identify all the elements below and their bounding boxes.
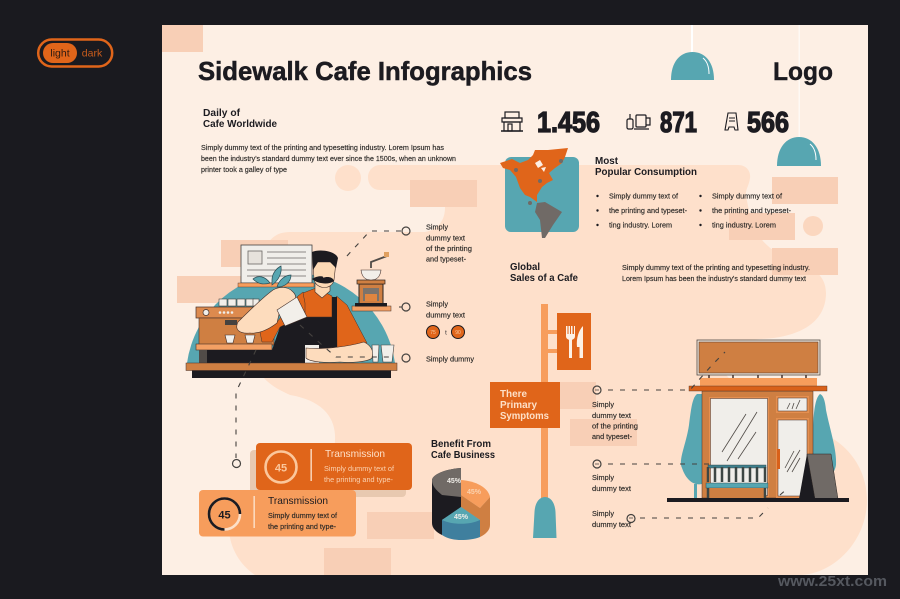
callout text: upper: Simply: [426, 222, 448, 232]
callout text: store lower: Simply: [592, 509, 614, 518]
store sign board: [697, 340, 820, 378]
text block: global sales of a cafe: Lorem Ipsum has been the industry's standard dummy text: [622, 274, 807, 283]
barista shirt left: [260, 292, 308, 342]
cup in hand: [305, 345, 319, 363]
text block: most popular consumption: [595, 155, 791, 230]
top small window: [776, 396, 809, 413]
barista lower arm: [306, 342, 373, 362]
counter: [186, 363, 397, 370]
watermark: www.25xt.com: [777, 574, 887, 590]
transmission card dark: Simply dummy text of: [324, 464, 395, 473]
glasses on counter: [372, 345, 394, 362]
transmission card shadow: [250, 450, 406, 497]
store body: [702, 391, 813, 498]
callout text and badges: middle: Simply: [426, 300, 448, 308]
map of the americas: [500, 148, 579, 238]
there primary symptoms box: [490, 382, 560, 428]
callout text and badges: middle: [426, 300, 466, 338]
trees: [681, 394, 836, 499]
icon: a-frame board: [725, 113, 738, 130]
transmission card light: [199, 490, 356, 536]
light and dark toggle: light: [50, 48, 70, 60]
barista apron body: [207, 300, 337, 363]
hanging lamp left: [671, 25, 714, 80]
coffee grinder: [352, 252, 391, 311]
callout text and badges: middle: 75: [430, 330, 436, 336]
callout text: store upper: [592, 400, 638, 441]
espresso machine: [196, 299, 276, 363]
stat: 871: 871: [660, 107, 697, 139]
light and dark toggle: dark: [82, 48, 103, 60]
text block: most popular consumption: the printing and typeset-: [609, 206, 687, 215]
callout text: upper: and typeset-: [426, 254, 466, 264]
text block: global sales of a cafe: [510, 261, 810, 284]
plant: [253, 266, 291, 287]
apron right strap: [332, 297, 337, 348]
barista illustration: [186, 245, 397, 378]
text block: most popular consumption: ting industry. Lorem: [712, 220, 776, 230]
milk pitcher: [277, 297, 307, 326]
transmission card light: Transmission: [268, 495, 328, 507]
a-frame sign: [799, 454, 838, 499]
transmission card light: the printing and type-: [268, 522, 336, 531]
callout text: store lower: [592, 509, 632, 529]
hanging lamp right: [777, 25, 821, 166]
heading: benefit from cafe business: Benefit From: [431, 438, 491, 450]
text block: most popular consumption: Popular Consumption: [595, 166, 697, 178]
callout text: store upper: and typeset-: [592, 432, 632, 441]
heading: benefit from cafe business: Cafe Business: [431, 449, 495, 461]
callout text: upper: dummy text: [426, 234, 466, 242]
stat: 566: 566: [747, 107, 789, 139]
callout text: store upper: dummy text: [592, 411, 632, 420]
there primary symptoms box: There: [500, 388, 527, 400]
callout lines for barista: [232, 227, 410, 468]
callout text: upper: of the printing: [426, 244, 472, 253]
callout text: lower: Simply dummy: [426, 354, 474, 364]
ground line: [667, 498, 849, 502]
text block: daily of cafe worldwide: Daily of: [203, 107, 240, 119]
logo: Logo: [773, 58, 833, 86]
bench: [706, 465, 768, 498]
text block: global sales of a cafe: Sales of a Cafe: [510, 272, 578, 284]
store illustration: [667, 340, 849, 502]
statistics row: [501, 107, 789, 139]
callout text and badges: middle: dummy text: [426, 310, 466, 320]
transmission card light: 45: [218, 510, 231, 522]
transmission card dark: the printing and type-: [324, 475, 393, 484]
pie chart: 45%: [447, 478, 462, 485]
light and dark toggle: [38, 40, 112, 66]
signpost: [490, 304, 591, 538]
text block: most popular consumption: Simply dummy text of: [712, 192, 783, 200]
text block: daily of cafe worldwide: [201, 107, 456, 174]
text block: most popular consumption: Simply dummy text of: [609, 192, 679, 200]
callout text: store middle: dummy text: [592, 484, 632, 493]
door: [776, 418, 809, 498]
callout text: store middle: [592, 473, 632, 493]
pie chart: [432, 468, 490, 540]
text block: global sales of a cafe: Simply dummy text of the printing and typesetting industry.: [622, 263, 810, 272]
barista shirt right: [336, 296, 367, 348]
barista head: [312, 250, 338, 298]
icon: cafe building: [501, 112, 523, 131]
text block: daily of cafe worldwide: been the industry's standard dummy text ever since the 1500s, when an unknown: [201, 154, 456, 163]
callout lines for store: [593, 352, 788, 522]
callout text: store upper: of the printing: [592, 422, 638, 430]
text block: global sales of a cafe: Global: [510, 261, 540, 273]
transmission card dark: Transmission: [325, 448, 385, 460]
callout text and badges: middle: t: [445, 330, 447, 336]
title: Sidewalk Cafe Infographics: [198, 56, 532, 86]
callout text: store middle: Simply: [592, 473, 614, 482]
text block: most popular consumption: ting industry. Lorem: [609, 220, 672, 230]
text block: most popular consumption: the printing and typeset-: [712, 206, 791, 215]
text block: daily of cafe worldwide: Cafe Worldwide: [203, 118, 277, 130]
transmission card dark: [256, 443, 412, 490]
callout text and badges: middle: 90: [455, 330, 461, 336]
poster and shelf: [238, 245, 314, 287]
transmission card light: Simply dummy text of: [268, 511, 338, 520]
icon: coffee cup: [627, 114, 650, 129]
text block: daily of cafe worldwide: Simply dummy text of the printing and typesetting industry. Lorem Ipsum has: [201, 143, 444, 152]
barista raised arm: [237, 287, 296, 333]
there primary symptoms box: Primary: [500, 399, 537, 411]
callout text: store upper: Simply: [592, 400, 614, 409]
sign board with cutlery icon: [557, 313, 591, 370]
callout text: upper: [426, 222, 472, 264]
heading: benefit from cafe business: [431, 438, 495, 461]
stat: 1.456: 1.456: [537, 107, 600, 139]
big window: [709, 397, 769, 497]
text block: daily of cafe worldwide: printer took a galley of type: [201, 165, 287, 174]
callout text: store lower: dummy text: [592, 520, 632, 529]
pie chart: 45%: [454, 514, 469, 521]
pie chart: 45%: [467, 489, 482, 496]
text block: most popular consumption: Most: [595, 155, 618, 167]
barista shirt chest: [303, 288, 332, 317]
transmission card dark: 45: [275, 462, 287, 474]
there primary symptoms box: Symptoms: [500, 410, 549, 422]
